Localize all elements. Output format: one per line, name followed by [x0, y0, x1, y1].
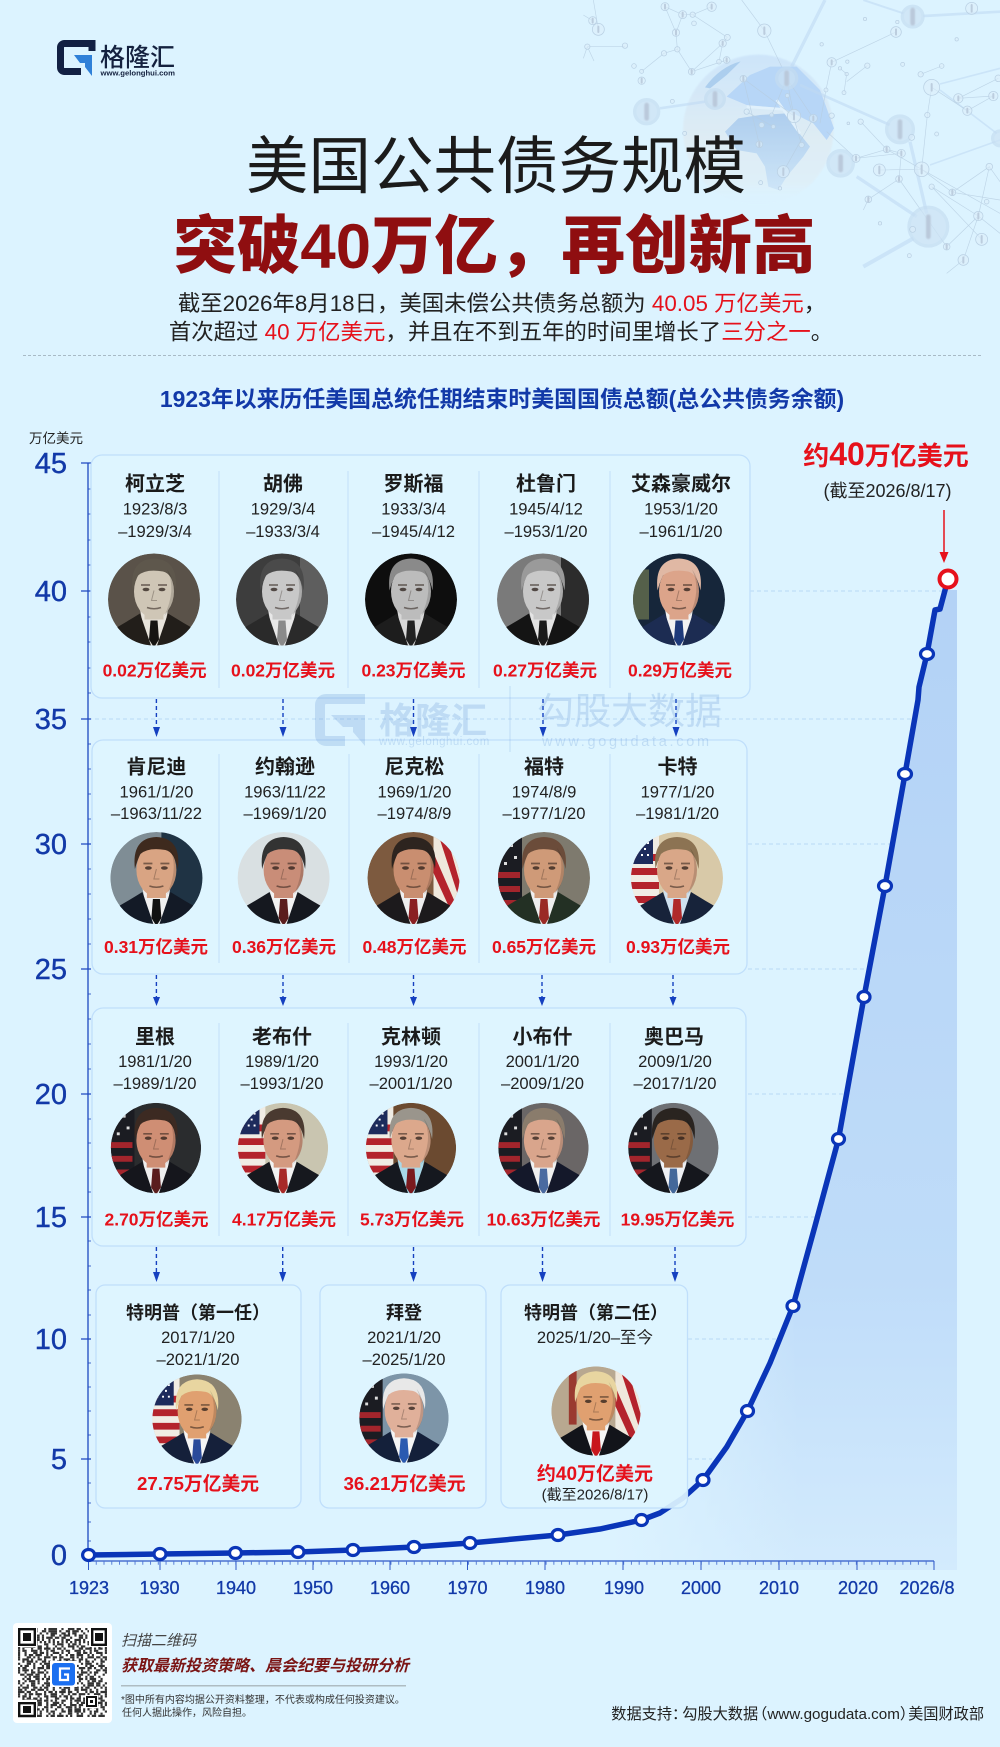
footer: call to action	[121, 1632, 411, 1686]
callout: about 40 trillion: (截至2026/8/17)	[823, 481, 952, 501]
president: George W. Bush: 2001/1/20	[506, 1052, 579, 1071]
president: Carter: 0.93万亿美元	[626, 937, 730, 957]
panel: Trump second term: 2025/1/20–至今	[537, 1328, 653, 1347]
y axis labels: 0	[51, 1540, 67, 1572]
president: Nixon: –1974/8/9	[377, 804, 451, 823]
y axis labels: 25	[35, 954, 67, 986]
x axis labels: 2010	[759, 1578, 799, 1598]
watermark: Gelonghui and Gogudata: 格隆汇	[379, 700, 487, 741]
title: main heading: 美国公共债务规模	[246, 132, 746, 202]
decorative globe and network	[583, 0, 1000, 273]
president: George H. W. Bush: 1989/1/20	[245, 1052, 319, 1071]
president: George W. Bush: 10.63万亿美元	[487, 1210, 600, 1230]
president: Roosevelt: –1945/4/12	[372, 522, 455, 541]
y axis labels: 45	[35, 448, 67, 480]
president: Truman: –1953/1/20	[504, 522, 588, 541]
president: Ford	[492, 756, 596, 957]
x axis labels: 1923	[69, 1578, 109, 1598]
logo: Gelonghui	[60, 43, 175, 78]
portrait: Biden	[357, 1373, 451, 1465]
x axis labels: 2026/8	[899, 1578, 955, 1598]
panel: Biden: 拜登	[386, 1303, 422, 1323]
text block: summary	[169, 291, 833, 344]
x axis labels: 1930	[139, 1578, 180, 1598]
president: Eisenhower: 1953/1/20	[644, 500, 718, 518]
president: Obama: 19.95万亿美元	[621, 1210, 734, 1230]
president: Reagan	[104, 1026, 209, 1230]
watermark: Gelonghui and Gogudata	[320, 686, 722, 752]
president: Reagan: 2.70万亿美元	[104, 1210, 209, 1230]
panel: Trump second term	[501, 1285, 688, 1508]
data markers	[83, 648, 934, 1560]
president: Reagan: –1989/1/20	[113, 1074, 197, 1093]
president: Nixon	[362, 756, 467, 957]
president: Kennedy: –1963/11/22	[111, 804, 202, 823]
president: Obama: 2009/1/20	[638, 1052, 712, 1071]
footer: call to action: 扫描二维码	[121, 1632, 197, 1650]
president: Obama: 奥巴马	[644, 1026, 704, 1048]
president: George H. W. Bush	[232, 1026, 336, 1230]
president: Roosevelt: 罗斯福	[384, 472, 444, 496]
president: Roosevelt	[361, 472, 466, 680]
president: Carter	[626, 756, 730, 957]
end marker	[940, 570, 956, 588]
president: Nixon: 0.48万亿美元	[362, 937, 467, 957]
president: Truman: 1945/4/12	[509, 500, 583, 518]
president: Hoover: 0.02万亿美元	[231, 660, 335, 680]
x axis labels: 1950	[293, 1578, 333, 1598]
debt amount: 27.75万亿美元	[137, 1473, 259, 1494]
area fill under curve	[600, 590, 957, 1570]
panel: presidents row 2	[92, 740, 747, 974]
x axis labels: 1980	[525, 1578, 565, 1598]
logo: Gelonghui: www.gelonghui.com	[100, 68, 175, 78]
president: Hoover: 1929/3/4	[251, 500, 315, 518]
y axis labels: 30	[35, 829, 67, 861]
president: Clinton: 克林顿	[381, 1026, 441, 1048]
debt amount: 约40万亿美元	[537, 1463, 653, 1485]
president: Coolidge: 柯立芝	[125, 472, 185, 496]
date note: (截至2026/8/17)	[542, 1486, 648, 1504]
panel: Biden: –2025/1/20	[362, 1350, 446, 1369]
president: Truman	[493, 472, 597, 680]
footer: QR code	[13, 1623, 112, 1723]
watermark: Gelonghui and Gogudata: www.gelonghui.com	[378, 736, 490, 748]
debt curve	[89, 579, 948, 1555]
president: George H. W. Bush: –1993/1/20	[240, 1074, 324, 1093]
panel: presidents row 3	[92, 1008, 746, 1246]
president: Johnson: 1963/11/22	[244, 782, 326, 802]
president: Coolidge: 0.02万亿美元	[103, 660, 207, 680]
president: Eisenhower: –1961/1/20	[639, 522, 723, 541]
president: Clinton: 1993/1/20	[374, 1052, 448, 1071]
president: Obama: –2017/1/20	[633, 1074, 717, 1093]
y axis labels: 5	[51, 1444, 67, 1476]
x axis labels: 2020	[838, 1578, 878, 1598]
portrait: Trump	[150, 1374, 244, 1466]
president: Ford: 0.65万亿美元	[492, 937, 596, 957]
y axis labels: 10	[35, 1324, 67, 1356]
chart heading: 1923年以来历任美国总统任期结束时美国国债总额(总公共债务余额)	[160, 386, 844, 412]
president: Johnson: –1969/1/20	[243, 804, 327, 823]
president: Kennedy: 0.31万亿美元	[104, 937, 208, 957]
president: Johnson	[232, 754, 336, 957]
president: Hoover	[231, 472, 335, 680]
arrows: row 2 to row 3	[153, 975, 676, 1006]
panel: Trump second term: 特明普（第二任）	[524, 1302, 668, 1323]
text block: summary: 首次超过 40 万亿美元，并且在不到五年的时间里增长了三分之一。	[169, 320, 833, 344]
president: Ford: –1977/1/20	[502, 804, 586, 823]
president: Carter: –1981/1/20	[636, 804, 719, 823]
panel: Biden	[320, 1285, 486, 1508]
president: Clinton: 5.73万亿美元	[360, 1210, 464, 1230]
president: Coolidge: –1929/3/4	[118, 522, 192, 541]
president: Kennedy	[104, 756, 208, 957]
president: Johnson: 约翰逊	[255, 754, 315, 778]
president: Kennedy: 1961/1/20	[119, 782, 193, 802]
president: George H. W. Bush: 老布什	[252, 1026, 312, 1048]
x axis labels: 1990	[604, 1578, 644, 1598]
arrows: row 3 to row 4	[153, 1247, 678, 1282]
president: Reagan: 1981/1/20	[118, 1052, 192, 1071]
y axis labels: 35	[35, 704, 67, 736]
x axis labels: 1960	[370, 1578, 410, 1598]
president: Clinton: –2001/1/20	[369, 1074, 453, 1093]
y axis labels: 40	[35, 576, 67, 608]
president: George W. Bush: 小布什	[512, 1026, 572, 1048]
president: Hoover: –1933/3/4	[246, 522, 320, 541]
president: Carter: 卡特	[658, 756, 698, 778]
president: George W. Bush: –2009/1/20	[501, 1074, 584, 1093]
footer: disclaimer: 任何人据此操作，风险自担。	[122, 1706, 252, 1719]
president: Eisenhower: 0.29万亿美元	[628, 660, 732, 680]
panel: presidents row 1	[91, 455, 750, 698]
panel: Trump first term: 2017/1/20	[161, 1328, 235, 1347]
president: Eisenhower: 艾森豪威尔	[631, 472, 731, 496]
arrows: row 1 to row 2	[153, 699, 680, 737]
callout: about 40 trillion	[803, 436, 969, 563]
president: Carter: 1977/1/20	[641, 782, 714, 802]
president: Truman: 杜鲁门	[516, 472, 576, 496]
president: Nixon: 尼克松	[384, 756, 444, 778]
president: Johnson: 0.36万亿美元	[232, 937, 336, 957]
x axis labels: 2000	[681, 1578, 721, 1598]
panel: Biden: 2021/1/20	[367, 1328, 441, 1347]
panel: Trump first term: –2021/1/20	[156, 1350, 240, 1369]
watermark: Gelonghui and Gogudata: 勾股大数据	[537, 691, 722, 732]
panel: Trump first term: 特明普（第一任）	[126, 1302, 270, 1323]
president: Hoover: 胡佛	[263, 472, 303, 496]
y axis labels	[35, 448, 67, 1572]
president: Ford: 1974/8/9	[512, 782, 576, 802]
president: Obama	[621, 1026, 734, 1230]
president: George W. Bush	[487, 1026, 600, 1230]
callout: about 40 trillion: 约40万亿美元	[803, 436, 969, 472]
footer: disclaimer: *图中所有内容均据公开资料整理，不代表或构成任何投资建议。	[121, 1693, 405, 1706]
president: Truman: 0.27万亿美元	[493, 660, 597, 680]
panel: Trump first term	[96, 1285, 301, 1508]
logo: Gelonghui: 格隆汇	[100, 44, 175, 72]
watermark: Gelonghui and Gogudata: www.gogudata.com	[541, 734, 712, 750]
x axis labels: 1970	[447, 1578, 488, 1598]
y axis unit: 万亿美元	[29, 431, 83, 446]
portrait: Trump	[549, 1366, 643, 1458]
footer: disclaimer	[121, 1693, 405, 1719]
x axis	[88, 1561, 934, 1570]
footer: data source: 数据支持：勾股大数据（www.gogudata.com）美国财政部	[611, 1706, 984, 1723]
president: Nixon: 1969/1/20	[377, 782, 451, 802]
president: Reagan: 里根	[135, 1026, 175, 1048]
president: Ford: 福特	[524, 756, 564, 778]
president: George H. W. Bush: 4.17万亿美元	[232, 1210, 336, 1230]
title: red headline: 突破40万亿，再创新高	[173, 212, 816, 282]
y axis	[81, 463, 91, 1561]
president: Roosevelt: 0.23万亿美元	[361, 660, 466, 680]
y axis labels: 15	[35, 1202, 67, 1234]
president: Clinton	[360, 1026, 464, 1230]
president: Coolidge	[103, 472, 207, 680]
x axis labels	[69, 1578, 955, 1598]
x axis labels: 1940	[216, 1578, 256, 1598]
line chart: public debt 1923 to 2026	[29, 431, 957, 1598]
debt amount: 36.21万亿美元	[343, 1473, 466, 1494]
president: Roosevelt: 1933/3/4	[381, 500, 446, 518]
president: Coolidge: 1923/8/3	[123, 500, 187, 518]
y axis labels: 20	[35, 1079, 67, 1111]
text block: summary: 截至2026年8月18日，美国未偿公共债务总额为 40.05 万亿美元，	[178, 291, 826, 316]
president: Eisenhower	[628, 472, 732, 680]
president: Kennedy: 肯尼迪	[126, 756, 186, 778]
footer: call to action: 获取最新投资策略、晨会纪要与投研分析	[121, 1657, 411, 1675]
